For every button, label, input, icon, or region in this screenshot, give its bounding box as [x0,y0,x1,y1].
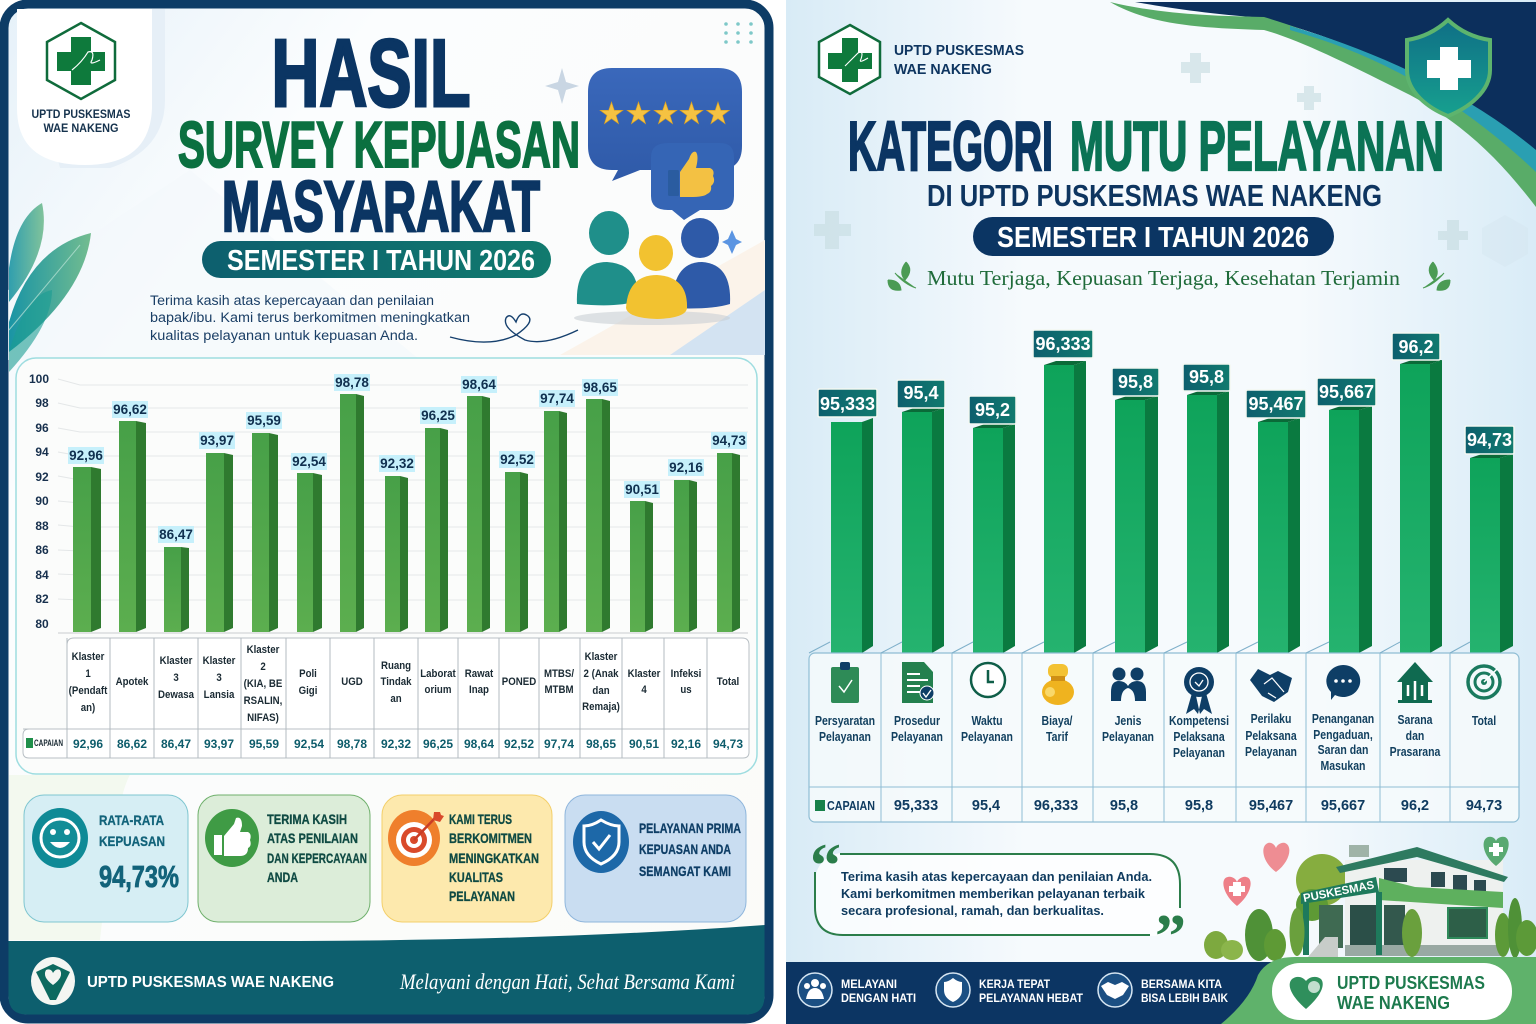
table labels: Pelaksana [1245,730,1297,743]
card: thanks: ANDA [267,869,298,885]
table labels: Pengaduan, [1313,729,1373,742]
table header labels: Tindak [380,677,412,688]
table header labels: Klaster [203,656,235,667]
value labels: survey: 96,25 [421,408,455,423]
value labels: quality: 94,73 [1467,430,1512,450]
card: thanks: DAN KEPERCAYAAN [267,850,367,866]
card: average satisfaction [24,795,188,922]
value labels: quality: 96,333 [1035,334,1091,354]
table capaian row: 97,74 [544,737,574,751]
table capaian row [26,737,743,751]
footer item: together better [1098,973,1228,1007]
icon: money bag [1042,664,1074,705]
table labels: Pelayanan [1245,746,1297,759]
footer: left: Melayani dengan Hati, Sehat Bersama Kami [399,969,735,994]
bars: quality [831,360,1513,653]
table header labels: an) [81,703,95,714]
logo: right: UPTD PUSKESMAS [894,43,1024,59]
value labels: quality [818,330,1514,454]
intro text: Terima kasih atas kepercayaan dan penilaian [150,293,434,308]
intro text: kualitas pelayanan untuk kepuasan Anda. [150,328,418,343]
callout: thanks quote: secara profesional, ramah, dan berkualitas. [841,903,1104,918]
table header labels: 3 [173,673,179,684]
value labels: survey: 98,65 [583,380,617,395]
table labels: Jenis [1115,715,1141,728]
footer item: together better: BISA LEBIH BAIK [1141,991,1228,1005]
table labels: Prasarana [1390,746,1441,759]
value labels: survey: 96,62 [113,402,147,417]
footer: left: UPTD PUSKESMAS WAE NAKENG [87,974,334,991]
chart axis: 82 [35,592,49,606]
table capaian row: CAPAIAN [34,738,63,748]
table labels: Persyaratan [815,715,875,728]
table capaian row: 96,333 [1034,798,1078,814]
card: excellent service: PELAYANAN PRIMA [639,820,741,836]
table header labels: Klaster [628,669,660,680]
table labels: Total [1472,715,1496,728]
table header labels: MTBS/ [544,669,574,680]
card: commitment: KAMI TERUS [449,811,512,827]
table capaian row: 95,8 [1185,798,1213,814]
table header labels: 2 (Anak [584,669,619,680]
icon: smile [32,808,88,868]
value labels: quality: 95,667 [1319,382,1374,402]
table header labels: 2 [260,662,266,673]
badge: puskesmas name: UPTD PUSKESMAS [1337,973,1485,993]
illustration: puskesmas building [1204,845,1536,961]
table header labels: Poli [299,669,317,680]
table header labels: Inap [469,685,489,696]
table labels: Prosedur [894,715,940,728]
icon: closing quote: ” [1155,903,1186,971]
chart axis: 88 [35,519,49,533]
table header labels: dan [592,686,610,697]
table labels: Masukan [1321,760,1365,773]
table labels: Pelayanan [1173,747,1225,760]
value labels: survey: 93,97 [200,433,234,448]
intro text [150,293,470,343]
table labels: Pelayanan [961,731,1013,744]
badge: puskesmas name: WAE NAKENG [1337,993,1450,1013]
table labels: dan [1406,730,1424,743]
table header labels: 3 [216,673,222,684]
table header labels: (Pendaft [69,686,108,697]
table capaian row: 95,4 [972,798,1000,814]
table header labels: Klaster [72,652,104,663]
badge: puskesmas name [1272,963,1512,1020]
icon: handshake [1250,669,1292,702]
card: commitment: PELAYANAN [449,888,515,904]
table header labels [69,645,739,724]
table labels: Sarana [1398,714,1433,727]
icon: dot grid [724,22,753,44]
table labels: Tarif [1046,731,1068,744]
chart axis: 92 [35,470,49,484]
table header labels: Klaster [247,645,279,656]
value labels: survey: 86,47 [159,527,193,542]
value labels: quality: 95,2 [975,400,1010,420]
callout: thanks quote: Kami berkomitmen memberikan pelayanan terbaik [841,886,1146,901]
semester pill: SEMESTER I TAHUN 2026 [227,245,535,277]
table header labels: Total [717,677,739,688]
icon: floating hearts [1223,837,1509,906]
value labels: survey: 92,96 [69,448,103,463]
table labels: Pelayanan [819,731,871,744]
card: thanks [198,795,370,922]
icon: people [1111,668,1146,701]
card: excellent service: SEMANGAT KAMI [639,863,731,879]
table labels: Kompetensi [1169,715,1229,728]
icon: people group [574,211,742,325]
table header labels: orium [425,685,451,696]
table header labels: Klaster [585,652,617,663]
callout: thanks quote [810,832,1186,971]
icon: chat bubble [1326,665,1360,700]
icon: decorative leaves [9,203,91,372]
chart axis: 94 [35,445,49,459]
table labels: Penanganan [1312,713,1374,726]
table labels: Pelayanan [891,731,943,744]
table capaian row: 92,32 [381,737,411,751]
icon: shield check [573,811,629,873]
chart axis: 98 [35,396,49,410]
table header labels: Klaster [160,656,192,667]
table capaian row: 92,54 [294,737,324,751]
title: survey: SURVEY KEPUASAN [178,108,580,181]
icon: sparkle [545,68,579,104]
value labels: quality: 95,4 [903,383,939,403]
table capaian row: 92,96 [73,737,103,751]
title: quality [848,107,1444,185]
ghost plus marks [814,53,1528,267]
table labels: Perilaku [1251,713,1291,726]
value labels: quality: 95,8 [1118,372,1153,392]
callout: thanks quote: Terima kasih atas kepercayaan dan penilaian Anda. [841,869,1152,884]
table labels: Pelayanan [1102,731,1154,744]
table header labels: Lansia [204,690,235,701]
card: thanks: ATAS PENILAIAN [267,830,358,846]
card: average satisfaction: KEPUASAN [99,833,165,849]
footer item: serve with heart [798,973,916,1007]
table capaian row: 95,467 [1249,798,1293,814]
table capaian row: 95,59 [249,737,279,751]
icon: shield [1407,20,1490,116]
table capaian row: 94,73 [713,737,743,751]
table capaian row: 86,47 [161,737,191,751]
table capaian row: 95,8 [1110,798,1138,814]
value labels: survey: 92,54 [292,454,326,469]
value labels: quality: 95,8 [1189,367,1224,387]
icon: thumbs up [205,809,259,867]
table labels: Biaya/ [1042,715,1073,728]
footer item: work accurately: KERJA TEPAT [979,977,1051,991]
card: commitment [382,795,552,922]
table capaian row: 98,64 [464,737,494,751]
table capaian row: 94,73 [1466,798,1502,814]
card: commitment: KUALITAS [449,869,503,885]
value labels: survey: 92,16 [669,460,703,475]
card: thanks: TERIMA KASIH [267,811,347,827]
table capaian row: 96,25 [423,737,453,751]
value labels: quality: 95,333 [820,394,875,414]
data table: survey [23,638,749,758]
table capaian row: 95,667 [1321,798,1365,814]
table header labels: 4 [641,685,647,696]
semester pill: SEMESTER I TAHUN 2026 [997,222,1309,254]
chart axis: 86 [35,543,49,557]
table header labels: PONED [502,677,537,688]
table labels: Waktu [971,715,1003,728]
value labels: survey: 95,59 [247,413,281,428]
table header labels: us [680,685,692,696]
card: commitment: MENINGKATKAN [449,850,539,866]
building sign: PUSKESMAS [1302,879,1376,905]
logo card: UPTD PUSKESMAS [32,107,130,121]
footer: left [8,925,764,1014]
data table: quality [809,642,1519,822]
table capaian row: 86,62 [117,737,147,751]
table capaian row: CAPAIAN [827,798,875,813]
table header labels: Gigi [299,686,318,697]
value labels: survey: 92,52 [500,452,534,467]
logo: right [819,25,1024,94]
icon: clipboard [831,662,859,703]
building sign [1301,877,1382,955]
logo: right: WAE NAKENG [894,62,992,78]
table header labels: RSALIN, [244,696,282,707]
icon: rating bubble [588,68,742,220]
table header labels: NIFAS) [247,713,279,724]
icon: building [1397,662,1433,703]
subtitle: DI UPTD PUSKESMAS WAE NAKENG [927,178,1382,213]
value labels: survey [68,374,747,543]
title: survey [178,20,580,247]
top-right swoosh [1110,2,1536,207]
logo card: WAE NAKENG [44,121,118,135]
icon: target [1468,666,1500,698]
value labels: survey: 98,64 [462,377,496,392]
table capaian row: 92,16 [671,737,701,751]
footer item: work accurately: PELAYANAN HEBAT [979,991,1084,1005]
table header labels: Remaja) [582,702,620,713]
table header labels: MTBM [544,685,574,696]
bars: survey [73,394,740,632]
table capaian row: 98,78 [337,737,367,751]
icon: heart line [450,314,578,342]
chart axis: 90 [35,494,49,508]
tagline [888,262,1450,290]
table header labels: Ruang [381,661,411,672]
table labels: Saran dan [1318,744,1368,757]
value labels: survey: 98,78 [335,375,369,390]
chart axis: 100 [29,372,49,386]
icon: clock [971,663,1005,697]
value labels: survey: 90,51 [625,482,659,497]
table header labels: UGD [341,677,363,688]
table header labels: Apotek [116,677,149,688]
title: survey: HASIL [272,20,470,127]
intro text: bapak/ibu. Kami terus berkomitmen meningkatkan [150,310,470,325]
icon: rosette [1184,667,1214,714]
chart axis: 84 [35,568,49,582]
panel: survey results (left poster) [4,4,769,1019]
icon: footer logo [31,957,75,1005]
logo card [17,9,165,168]
value labels: quality: 96,2 [1398,337,1434,357]
title: quality: KATEGORI [848,107,1053,185]
footer item: work accurately [936,973,1084,1007]
table labels: Pelaksana [1173,731,1225,744]
footer item: serve with heart: DENGAN HATI [841,991,916,1005]
card: average satisfaction: RATA-RATA [99,812,164,828]
icon: document [902,662,934,703]
card: excellent service: KEPUASAN ANDA [639,841,731,857]
card: commitment: BERKOMITMEN [449,830,532,846]
value labels: survey: 94,73 [712,433,746,448]
table capaian row [815,798,1502,814]
table capaian row: 95,333 [894,798,938,814]
table labels [815,713,1496,773]
title: survey: MASYARAKAT [222,168,540,247]
panel: service quality (right poster) [786,0,1536,1024]
icon: target [388,810,444,866]
icon: opening quote: “ [810,832,841,900]
chart axis: 96 [35,421,49,435]
table header labels: Rawat [465,669,494,680]
table capaian row: 98,65 [586,737,616,751]
value labels: quality: 95,467 [1248,394,1304,414]
tagline: Mutu Terjaga, Kepuasan Terjaga, Kesehatan Terjamin [927,266,1401,290]
table capaian row: 90,51 [629,737,659,751]
chart axis [29,372,748,633]
table capaian row: 92,52 [504,737,534,751]
table header labels: Infeksi [671,669,701,680]
table header labels: Dewasa [158,690,194,701]
footer item: serve with heart: MELAYANI [841,977,897,991]
table capaian row: 96,2 [1401,798,1429,814]
value labels: survey: 97,74 [540,391,574,406]
table header labels: an [390,694,402,705]
value labels: survey: 92,32 [380,456,414,471]
footer item: together better: BERSAMA KITA [1141,977,1222,991]
card: average satisfaction: 94,73% [99,859,179,894]
table capaian row: 93,97 [204,737,234,751]
panel: bar chart card [16,358,757,774]
table header labels: (KIA, BE [244,679,282,690]
chart axis: 80 [35,617,49,631]
card: excellent service [565,795,746,922]
table header labels: Laborat [420,669,456,680]
footer: right [786,957,1536,1024]
table header labels: 1 [85,669,91,680]
